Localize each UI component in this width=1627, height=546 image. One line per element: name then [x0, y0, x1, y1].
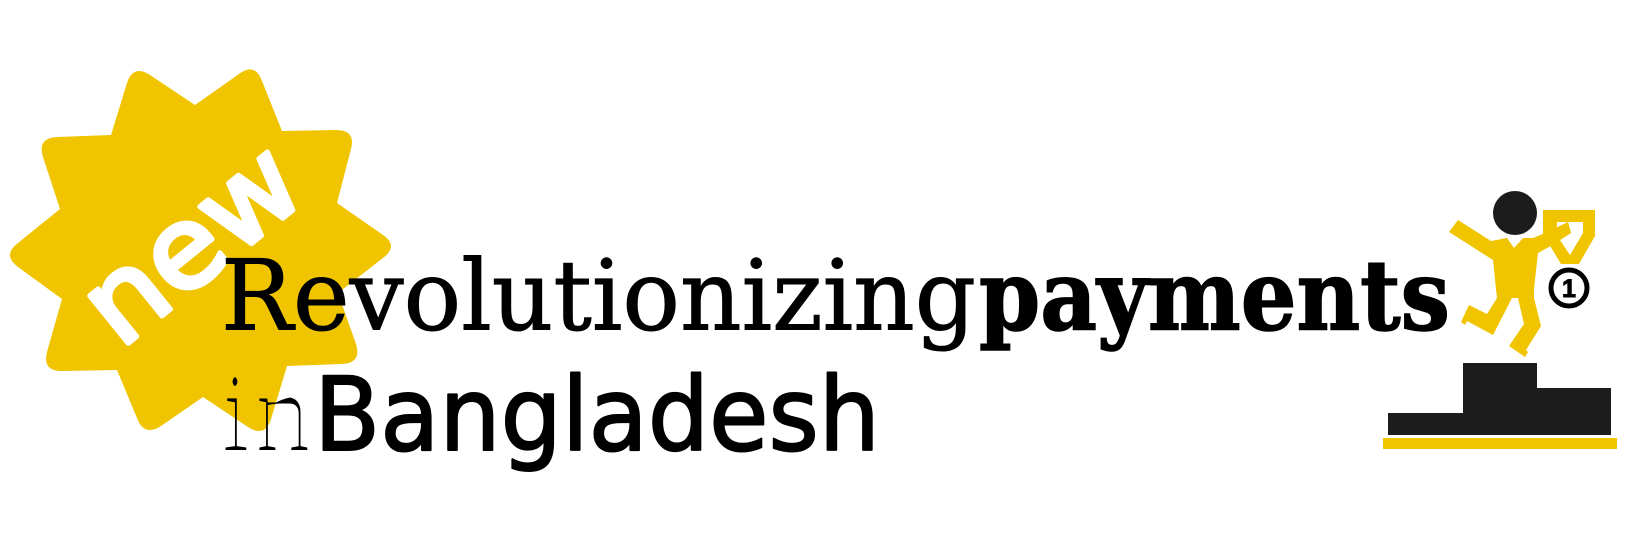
- badge label: new: new: [55, 116, 327, 371]
- icon: yellow starburst badge: [10, 69, 391, 431]
- heading: Revolutionizing: Revolutionizing: [221, 240, 976, 352]
- icon: podium: [1388, 363, 1611, 435]
- heading: payments: payments: [979, 238, 1450, 352]
- heading: Bangladesh: Bangladesh: [314, 356, 880, 475]
- icon: circled number one: [1551, 270, 1587, 306]
- icon: winner jumping on podium with trophy: [1449, 191, 1595, 357]
- podium base bar: [1383, 438, 1617, 449]
- figure body: [1449, 220, 1571, 357]
- trophy: [1543, 210, 1595, 264]
- figure head: [1493, 191, 1537, 235]
- heading: in: in: [219, 351, 313, 475]
- icon: circled number one: 1: [1562, 275, 1576, 303]
